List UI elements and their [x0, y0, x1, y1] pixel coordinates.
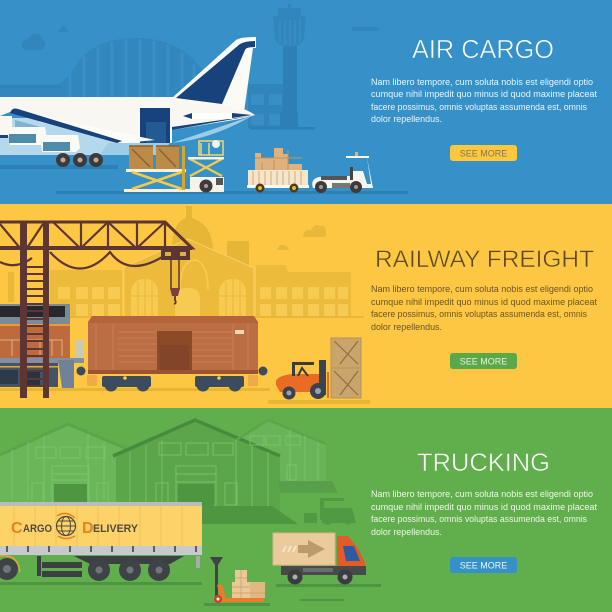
gantry crane — [0, 222, 192, 398]
text block: railway description — [371, 284, 597, 332]
text block: air cargo description: Nam libero tempore, cum soluta nobis est eligendi optio — [371, 77, 593, 87]
landing gear wheels — [56, 153, 103, 167]
text block: railway description: cumque nihil impedit quo minus id quod maxime placeat — [371, 297, 597, 307]
baggage cart with boxes — [247, 148, 309, 192]
text block: air cargo description: cumque nihil impedit quo minus id quod maxime placeat — [371, 89, 597, 99]
text block: trucking description: dolor repellendus. — [371, 527, 442, 537]
text block: trucking description: facere possimus, omnis voluptas assumenda est, omnis — [371, 514, 587, 524]
text block: air cargo description: dolor repellendus. — [371, 114, 442, 124]
panel: air cargo — [0, 0, 612, 204]
button: see more blue: SEE MORE — [460, 560, 507, 570]
button: see more green — [450, 353, 517, 369]
background: warehouses — [0, 420, 356, 525]
engines — [0, 120, 80, 152]
trailer logo: cargo delivery: ARGO — [23, 523, 52, 535]
boxcar bogies — [76, 366, 268, 392]
boxcar — [88, 316, 258, 374]
text block: railway description: dolor repellendus. — [371, 322, 442, 332]
trailer logo: cargo delivery — [11, 513, 139, 538]
text block: air cargo description — [371, 77, 597, 124]
text block: trucking description: cumque nihil impedit quo minus id quod maxime placeat — [371, 502, 597, 512]
text block: railway description: facere possimus, omnis voluptas assumenda est, omnis — [371, 309, 587, 319]
background: airport silhouette — [0, 4, 381, 130]
text block: trucking description: Nam libero tempore, cum soluta nobis est eligendi optio — [371, 489, 593, 499]
background: station silhouette — [0, 206, 364, 318]
delivery truck — [273, 533, 366, 584]
scissor lift with crates — [124, 140, 224, 192]
trailer logo: cargo delivery: ELIVERY — [93, 523, 139, 535]
pallet jack with boxes — [210, 557, 265, 603]
trailer logo: cargo delivery: D — [82, 520, 94, 537]
locomotive — [0, 304, 84, 388]
trailer truck — [0, 502, 202, 581]
ground lines — [0, 388, 370, 404]
button: see more yellow — [450, 145, 517, 161]
text block: railway description: Nam libero tempore, cum soluta nobis est eligendi optio — [371, 284, 593, 294]
trailer logo: cargo delivery: C — [11, 520, 23, 537]
text block: trucking description — [371, 489, 597, 537]
airplane — [0, 37, 256, 167]
panel: trucking — [0, 408, 612, 612]
ground shadows — [0, 582, 381, 606]
heading: railway freight: RAILWAY FREIGHT — [375, 246, 594, 273]
panel: railway freight — [0, 204, 612, 408]
heading: air cargo: AIR CARGO — [412, 36, 554, 64]
forklift and crates — [276, 338, 361, 400]
button: see more green: SEE MORE — [460, 356, 507, 366]
button: see more blue — [450, 557, 517, 573]
heading: trucking: TRUCKING — [417, 449, 550, 477]
ground shadows — [0, 165, 408, 194]
text block: air cargo description: facere possimus, omnis voluptas assumenda est, omnis — [371, 102, 587, 112]
button: see more yellow: SEE MORE — [460, 148, 507, 158]
airport tug vehicle — [312, 152, 373, 193]
